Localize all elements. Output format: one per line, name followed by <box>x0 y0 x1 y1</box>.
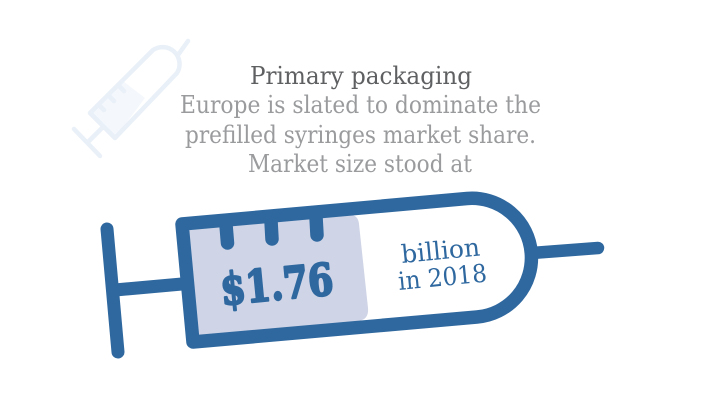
icon: faded background syringe <box>74 41 188 156</box>
text block: market description: prefilled syringes market share. <box>185 121 536 149</box>
text block: market description: Europe is slated to dominate the <box>180 91 541 119</box>
heading: Primary packaging <box>250 62 472 90</box>
label: billion in 2018: billion <box>400 233 481 269</box>
value: $1.76: $1.76 <box>218 254 336 316</box>
syringe tick marks <box>226 217 317 243</box>
label: billion in 2018: in 2018 <box>397 259 488 296</box>
label: billion in 2018 <box>397 233 488 296</box>
icon: main syringe <box>107 198 598 352</box>
text block: market description <box>180 91 541 178</box>
syringe needle <box>532 248 598 253</box>
syringe fill level <box>188 215 368 336</box>
syringe barrel <box>182 198 531 342</box>
syringe plunger <box>107 229 182 352</box>
text block: market description: Market size stood at <box>248 150 472 178</box>
